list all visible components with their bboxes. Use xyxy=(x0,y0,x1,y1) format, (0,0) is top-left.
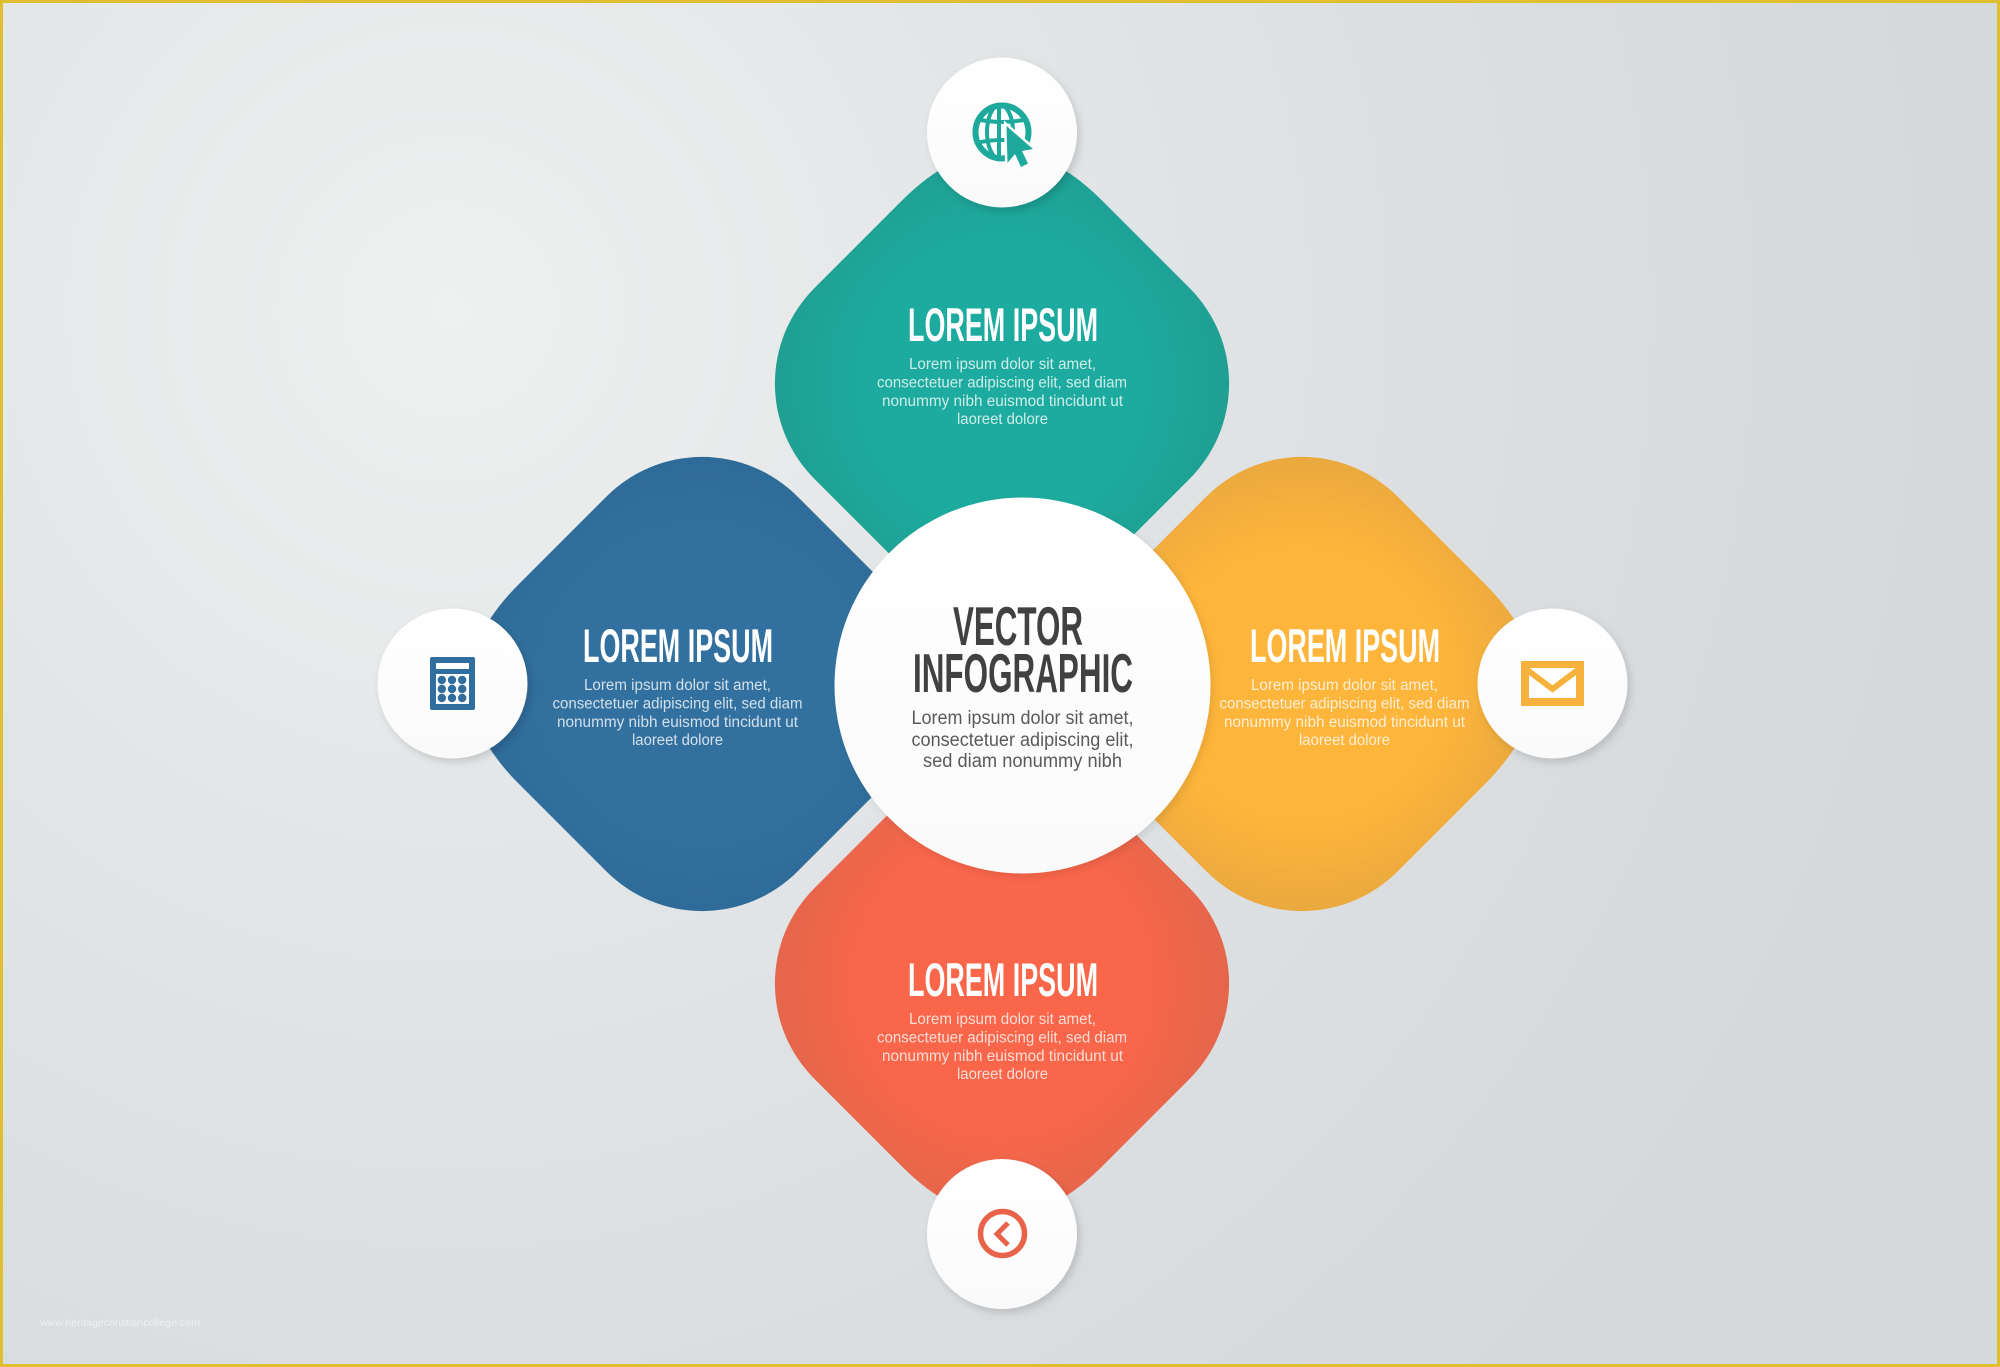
yellow heading: LOREM IPSUM xyxy=(1250,619,1440,672)
yellow petal shape xyxy=(1069,457,1535,911)
center title: INFOGRAPHIC xyxy=(913,642,1133,704)
red body text: laoreet dolore xyxy=(957,1066,1048,1083)
yellow body text xyxy=(1220,677,1470,749)
yellow body text: nonummy nibh euismod tincidunt ut xyxy=(1224,714,1466,731)
panel: right yellow petal xyxy=(1069,457,1535,911)
red body text xyxy=(877,1011,1127,1083)
icon badge: globe with cursor xyxy=(927,58,1077,208)
yellow body text: laoreet dolore xyxy=(1299,732,1390,749)
teal body text xyxy=(877,356,1127,428)
red body text: Lorem ipsum dolor sit amet, xyxy=(909,1011,1096,1028)
teal body text: consectetuer adipiscing elit, sed diam xyxy=(877,374,1127,392)
center title: VECTOR xyxy=(953,595,1083,657)
teal petal shape xyxy=(775,150,1229,616)
red petal shape xyxy=(775,750,1229,1216)
icon badge: envelope xyxy=(1478,608,1628,758)
red body text: nonummy nibh euismod tincidunt ut xyxy=(882,1048,1124,1065)
teal body text: laoreet dolore xyxy=(957,411,1048,428)
blue body text: nonummy nibh euismod tincidunt ut xyxy=(557,714,799,731)
center body text: Lorem ipsum dolor sit amet, xyxy=(912,708,1134,729)
panel: bottom red petal xyxy=(775,750,1229,1216)
red heading: LOREM IPSUM xyxy=(908,953,1098,1006)
panel: center circle xyxy=(834,498,1210,874)
blue petal shape xyxy=(469,457,935,911)
center body text: consectetuer adipiscing elit, xyxy=(912,730,1134,751)
blue body text: consectetuer adipiscing elit, sed diam xyxy=(552,696,802,712)
center title xyxy=(913,595,1133,704)
center body text: sed diam nonummy nibh xyxy=(923,751,1122,772)
blue body text: Lorem ipsum dolor sit amet, xyxy=(584,677,771,694)
icon badge: calculator xyxy=(378,608,528,758)
blue body text: laoreet dolore xyxy=(632,732,723,749)
icon badge: back arrow xyxy=(927,1159,1077,1309)
blue body text xyxy=(552,677,802,749)
panel: top teal petal xyxy=(775,150,1229,616)
teal heading: LOREM IPSUM xyxy=(908,298,1098,351)
panel: left blue petal xyxy=(469,457,935,911)
yellow body text: Lorem ipsum dolor sit amet, xyxy=(1251,677,1438,694)
teal body text: nonummy nibh euismod tincidunt ut xyxy=(882,393,1124,410)
center body text xyxy=(912,708,1134,772)
blue heading: LOREM IPSUM xyxy=(583,619,773,672)
watermark url: www.heritagechristiancollege.com xyxy=(39,1317,200,1329)
yellow body text: consectetuer adipiscing elit, sed diam xyxy=(1220,696,1470,712)
teal body text: Lorem ipsum dolor sit amet, xyxy=(909,356,1096,373)
center disc xyxy=(834,498,1210,874)
red body text: consectetuer adipiscing elit, sed diam xyxy=(877,1030,1127,1046)
